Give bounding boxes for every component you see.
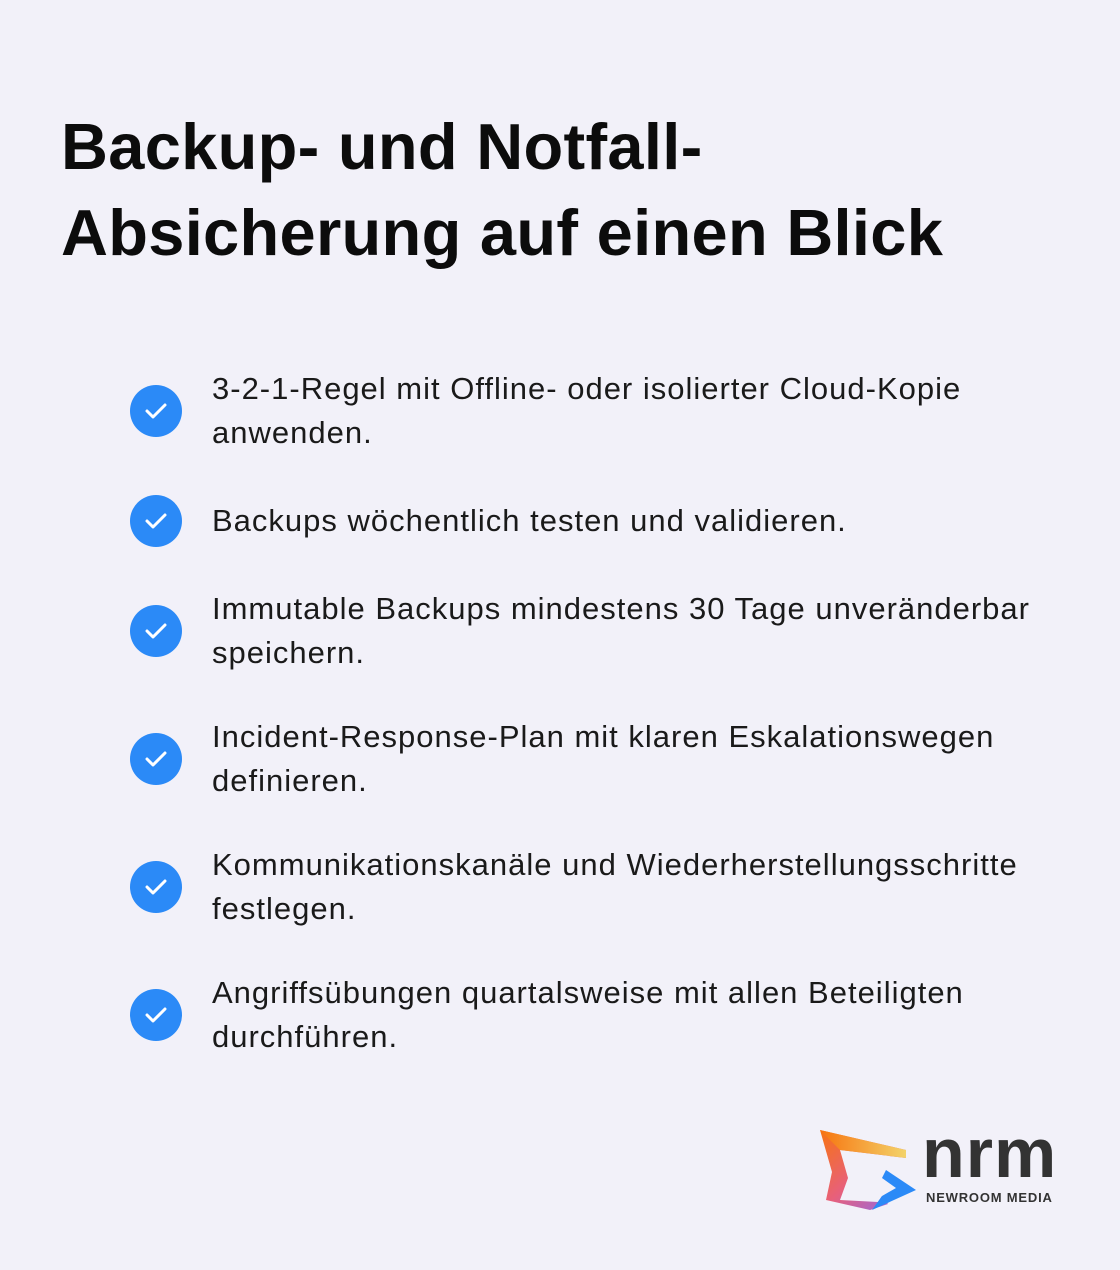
- item 4: Incident-Response-Plan mit klaren Eskalationswegen: [212, 719, 994, 754]
- item 4: [130, 719, 994, 798]
- item 3: [130, 591, 1030, 670]
- item 3: speichern.: [212, 635, 365, 670]
- title: Backup- und Notfall-: [61, 110, 703, 183]
- item 4: definieren.: [212, 763, 368, 798]
- title: [61, 110, 943, 269]
- item 2: Backups wöchentlich testen und validieren.: [212, 503, 847, 538]
- logo: NEWROOM MEDIA: [926, 1190, 1053, 1205]
- item 3: Immutable Backups mindestens 30 Tage unveränderbar: [212, 591, 1030, 626]
- logo: [820, 1114, 1057, 1210]
- item 5: Kommunikationskanäle und Wiederherstellungsschritte: [212, 847, 1018, 882]
- item 1: [130, 371, 961, 450]
- item 2: [130, 495, 847, 547]
- title: Absicherung auf einen Blick: [61, 196, 943, 269]
- item 5: festlegen.: [212, 891, 356, 926]
- logo text: nrm: [922, 1114, 1057, 1192]
- item 5: [130, 847, 1018, 926]
- item 6: durchführen.: [212, 1019, 398, 1054]
- icon: logo mark: [820, 1130, 916, 1210]
- item 1: anwenden.: [212, 415, 373, 450]
- item 6: [130, 975, 964, 1054]
- item 1: 3-2-1-Regel mit Offline- oder isolierter Cloud-Kopie: [212, 371, 961, 406]
- item 6: Angriffsübungen quartalsweise mit allen Beteiligten: [212, 975, 964, 1010]
